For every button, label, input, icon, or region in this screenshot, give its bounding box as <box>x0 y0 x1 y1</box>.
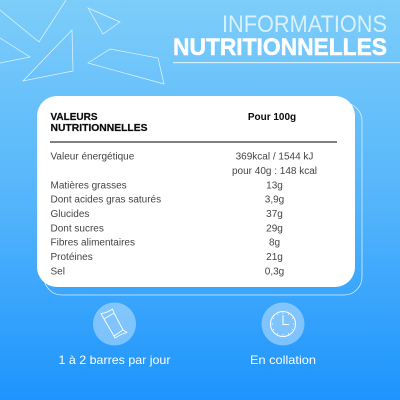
icon: snack bar <box>93 302 136 346</box>
title: NUTRITIONNELLES <box>173 34 387 61</box>
label: daily dose: 1 à 2 barres par jour <box>58 353 170 367</box>
panel: nutrition table <box>37 96 362 295</box>
nutrient values: 3,9g <box>265 194 284 206</box>
nutrient values: 13g <box>266 180 283 192</box>
nutrient labels: Protéines <box>50 252 93 263</box>
table header: NUTRITIONNELLES <box>50 123 148 134</box>
header rule <box>50 141 337 143</box>
nutrient labels: Valeur énergétique <box>50 152 135 162</box>
nutrient labels: Dont acides gras saturés <box>50 194 161 206</box>
nutrient values: 37g <box>266 209 283 220</box>
nutrient labels: Glucides <box>50 209 89 220</box>
title: INFORMATIONS <box>222 11 387 38</box>
panel card <box>37 96 355 287</box>
table header: VALEURS <box>50 112 98 123</box>
title underline <box>173 62 400 63</box>
nutrient values: pour 40g : 148 kcal <box>232 166 317 177</box>
nutrient values <box>232 152 317 278</box>
table header: Pour 100g <box>248 112 296 123</box>
table header <box>50 112 296 134</box>
nutrient labels: Matières grasses <box>50 180 127 192</box>
nutrient values: 369kcal / 1544 kJ <box>236 152 313 162</box>
nutrient labels <box>50 152 161 278</box>
title <box>173 11 387 61</box>
icon: clock <box>262 302 304 346</box>
label: timing: En collation <box>250 353 316 367</box>
nutrient values: 0,3g <box>265 266 284 278</box>
nutrient labels: Sel <box>50 266 65 278</box>
decorative triangles <box>0 0 164 84</box>
nutrient labels: Dont sucres <box>50 224 104 234</box>
nutrient values: 8g <box>269 238 280 248</box>
nutrient values: 21g <box>266 252 283 263</box>
nutrient labels: Fibres alimentaires <box>50 238 135 248</box>
nutrient values: 29g <box>266 224 283 234</box>
panel outline <box>44 103 362 295</box>
